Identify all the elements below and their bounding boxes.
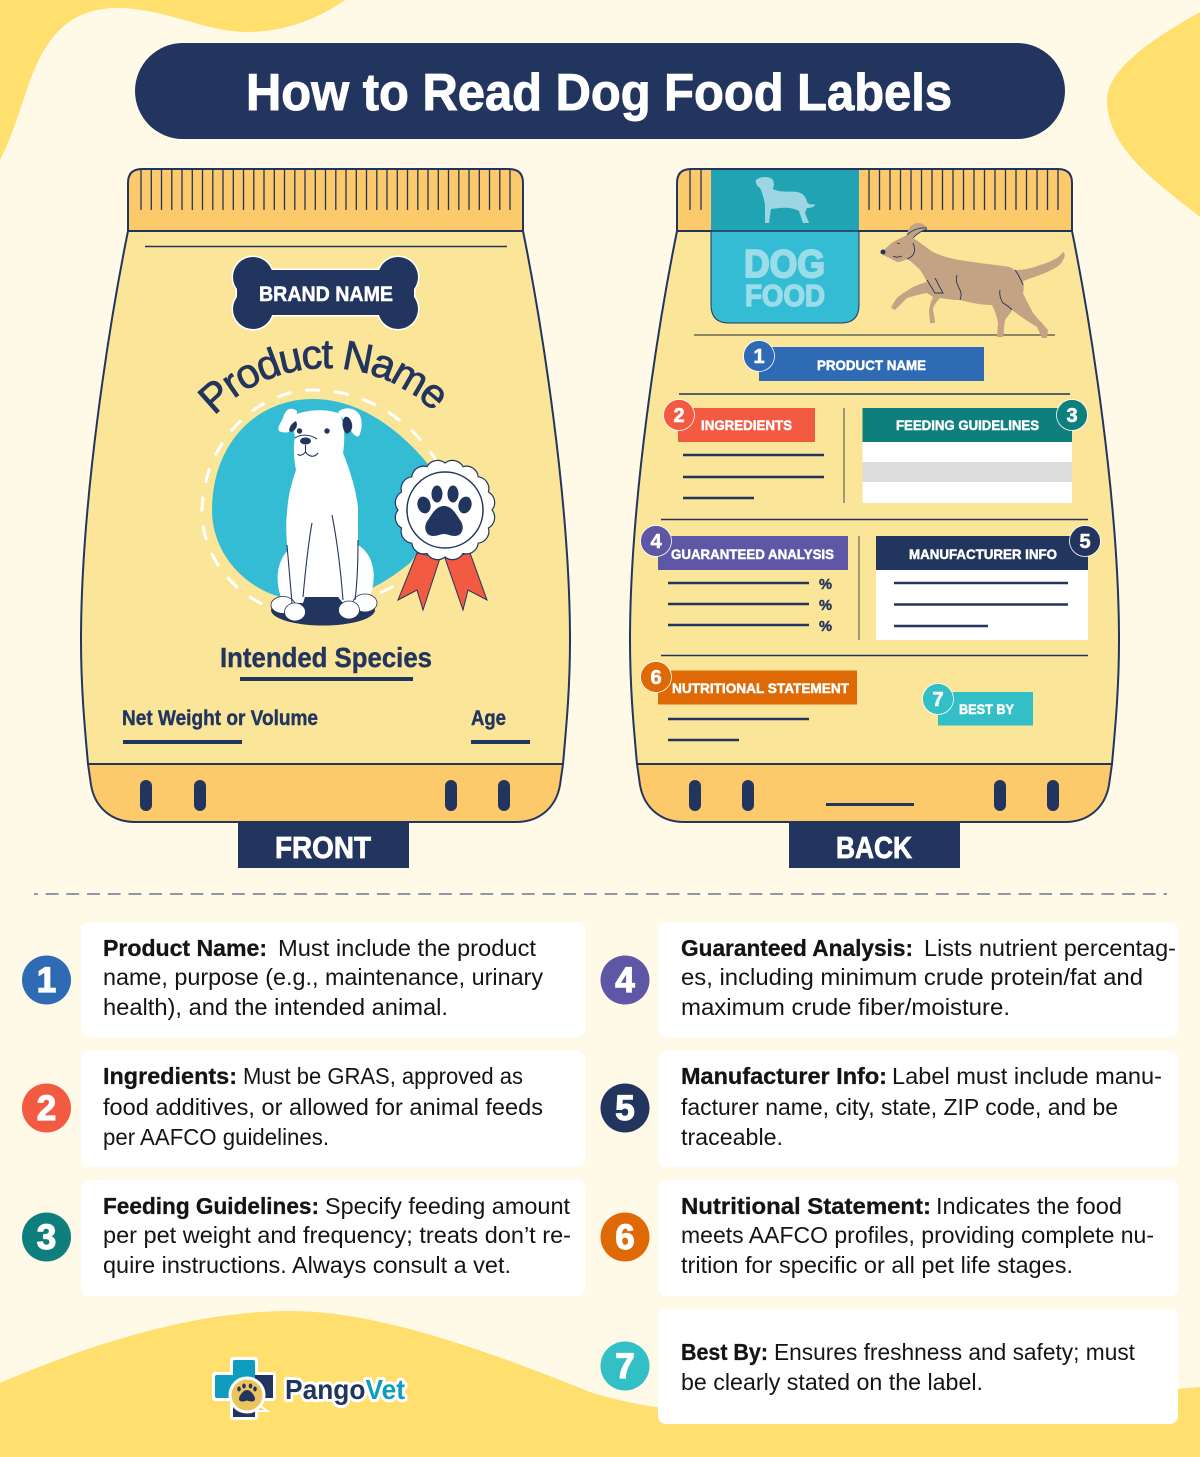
- label 2: ingredients: 2: [673, 405, 685, 427]
- item 6: nutritional statement: [600, 1180, 1178, 1296]
- item 1: product name: Must include the product: [278, 935, 536, 961]
- logo: PangoVet: PangoVet: [285, 1374, 405, 1405]
- label 1: product name: PRODUCT NAME: [817, 357, 926, 373]
- item 2: ingredients: food additives, or allowed for animal feeds: [103, 1094, 543, 1120]
- item 7: best by: 7: [615, 1347, 635, 1386]
- label 5: manufacturer info: 5: [1079, 531, 1091, 553]
- front tag: FRONT: [275, 830, 371, 865]
- blue blob: [212, 399, 433, 597]
- item 1: product name: name, purpose (e.g., maintenance, urinary: [103, 964, 543, 990]
- icon: dog silhouette: [756, 177, 815, 223]
- item 3: feeding guidelines: Specify feeding amount: [325, 1193, 570, 1219]
- back tag: BACK: [836, 830, 913, 865]
- label 2: ingredients: [664, 400, 824, 498]
- back tag: [789, 823, 960, 868]
- front tag: [238, 823, 409, 868]
- label 4: guaranteed analysis: 4: [650, 531, 662, 553]
- item 2: ingredients: Must be GRAS, approved as: [243, 1063, 523, 1089]
- label 7: best by: 7: [932, 689, 944, 711]
- item 6: nutritional statement: Indicates the food: [936, 1193, 1122, 1219]
- dog food tab: FOOD: [745, 278, 825, 313]
- item 4: guaranteed analysis: 4: [615, 961, 635, 1000]
- product name arc text: Product Name: [197, 340, 444, 414]
- item 3: feeding guidelines: per pet weight and frequency; treats don’t re-: [103, 1222, 571, 1248]
- title: How to Read Dog Food Labels: [246, 64, 952, 122]
- item 5: manufacturer info: 5: [615, 1089, 635, 1128]
- bag bottom band: [88, 764, 563, 822]
- label 4: guaranteed analysis: [640, 526, 848, 635]
- item 4: guaranteed analysis: es, including minimum crude protein/fat and: [681, 964, 1143, 990]
- item 4: guaranteed analysis: Guaranteed Analysis:: [681, 935, 913, 961]
- item 7: best by: Ensures freshness and safety; must: [774, 1339, 1135, 1365]
- item 7: best by: [600, 1309, 1178, 1424]
- item 4: guaranteed analysis: Lists nutrient percentag-: [924, 935, 1176, 961]
- bag body: [81, 231, 570, 764]
- icon: bone brand name: BRAND NAME: [259, 283, 393, 306]
- bag bottom band: [637, 764, 1112, 822]
- item 6: nutritional statement: 6: [615, 1218, 635, 1257]
- title: [135, 43, 1065, 139]
- age: [471, 707, 530, 744]
- item 3: feeding guidelines: quire instructions. Always consult a vet.: [103, 1252, 511, 1278]
- dog food tab: [711, 170, 859, 323]
- item 2: ingredients: [22, 1051, 585, 1167]
- item 1: product name: Product Name:: [103, 935, 267, 961]
- item 6: nutritional statement: meets AAFCO profiles, providing complete nu-: [681, 1222, 1154, 1248]
- bag top seal: [128, 169, 523, 231]
- item 7: best by: Best By:: [681, 1339, 768, 1365]
- label 4: guaranteed analysis: GUARANTEED ANALYSIS: [671, 546, 834, 562]
- label 6: nutritional statement: 6: [650, 667, 662, 689]
- dashed ring: [202, 390, 437, 604]
- net weight: [122, 707, 318, 744]
- age: Age: [471, 707, 506, 730]
- item 3: feeding guidelines: Feeding Guidelines:: [103, 1193, 319, 1219]
- bag body: [630, 231, 1119, 764]
- net weight: Net Weight or Volume: [122, 707, 318, 730]
- label 7: best by: BEST BY: [959, 701, 1015, 717]
- label 3: feeding guidelines: [862, 400, 1088, 503]
- label 6: nutritional statement: NUTRITIONAL STATEMENT: [672, 680, 849, 696]
- bag top seal: [677, 169, 1072, 231]
- label 3: feeding guidelines: 3: [1066, 405, 1078, 427]
- item 4: guaranteed analysis: [600, 922, 1178, 1037]
- intended species: Intended Species: [220, 642, 432, 673]
- item 2: ingredients: Ingredients:: [103, 1063, 237, 1089]
- item 5: manufacturer info: Manufacturer Info:: [681, 1063, 887, 1089]
- item 5: manufacturer info: traceable.: [681, 1124, 783, 1150]
- item 2: ingredients: per AAFCO guidelines.: [103, 1124, 329, 1150]
- label 4: guaranteed analysis: %: [819, 618, 832, 635]
- item 6: nutritional statement: trition for specific or all pet life stages.: [681, 1252, 1073, 1278]
- item 3: feeding guidelines: [22, 1180, 585, 1296]
- label 5: manufacturer info: MANUFACTURER INFO: [909, 546, 1057, 562]
- icon: running dog: [880, 223, 1065, 338]
- label 5: manufacturer info: [876, 526, 1100, 640]
- label 4: guaranteed analysis: %: [819, 597, 832, 614]
- item 1: product name: [22, 922, 585, 1037]
- item 3: feeding guidelines: 3: [37, 1218, 56, 1257]
- item 1: product name: health), and the intended animal.: [103, 994, 448, 1020]
- icon: bone brand name: [233, 257, 418, 329]
- item 1: product name: 1: [37, 961, 56, 1000]
- label 1: product name: 1: [753, 346, 765, 368]
- panel: front of bag: [80, 168, 571, 823]
- item 6: nutritional statement: Nutritional Statement:: [681, 1193, 931, 1219]
- icon: sitting dog: [271, 408, 377, 626]
- label 4: guaranteed analysis: %: [819, 576, 832, 593]
- label 2: ingredients: INGREDIENTS: [701, 417, 792, 433]
- panel: back of bag: [630, 169, 1119, 822]
- icon: award rosette: [395, 460, 495, 610]
- logo: PangoVet: [215, 1360, 405, 1417]
- item 2: ingredients: 2: [37, 1089, 56, 1128]
- label 7: best by: [922, 684, 1033, 726]
- label 6: nutritional statement: [640, 662, 857, 740]
- item 5: manufacturer info: Label must include manu-: [892, 1063, 1162, 1089]
- item 4: guaranteed analysis: maximum crude fiber/moisture.: [681, 994, 1010, 1020]
- item 7: best by: be clearly stated on the label.: [681, 1369, 983, 1395]
- label 3: feeding guidelines: FEEDING GUIDELINES: [896, 417, 1039, 433]
- label 1: product name: [744, 340, 984, 381]
- item 5: manufacturer info: [600, 1051, 1178, 1167]
- item 5: manufacturer info: facturer name, city, state, ZIP code, and be: [681, 1094, 1118, 1120]
- dog food tab: DOG: [744, 243, 825, 286]
